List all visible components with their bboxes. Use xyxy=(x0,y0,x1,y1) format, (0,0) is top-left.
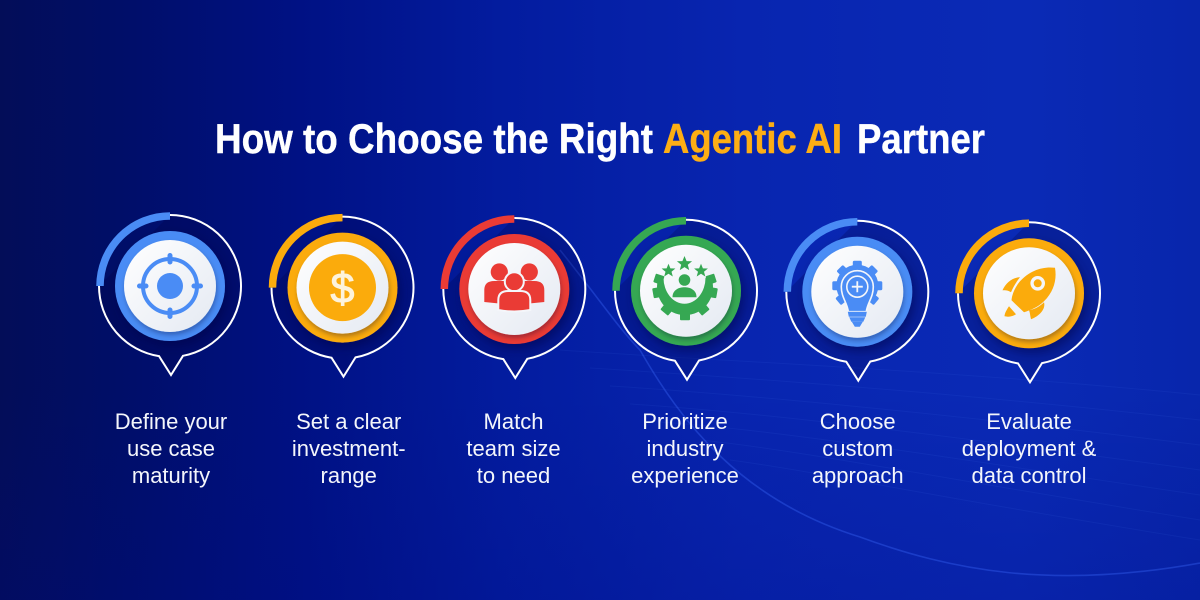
panel: custom approach xyxy=(786,221,928,381)
panel: define use case xyxy=(99,215,241,375)
icon: target xyxy=(140,256,200,316)
label: define your use case maturity: maturity xyxy=(132,463,210,488)
icon: rocket xyxy=(1002,267,1056,319)
label: match team size to need: Match xyxy=(484,409,543,434)
icon: light bulb with gear xyxy=(832,261,882,327)
label: prioritize industry experience: industry xyxy=(646,436,724,461)
panel: team size xyxy=(443,218,585,378)
label: prioritize industry experience: Prioritize xyxy=(642,409,728,434)
label: set a clear investment range: range xyxy=(321,463,377,488)
label: choose custom approach: custom xyxy=(822,436,893,461)
title: How to Choose the Right xyxy=(215,115,653,162)
panel: industry experience xyxy=(615,220,757,380)
label: define your use case maturity: Define your xyxy=(115,409,227,434)
icon: gear with person and stars xyxy=(652,256,718,320)
label: evaluate deployment and data control: Evaluate xyxy=(986,409,1072,434)
label: define your use case maturity: use case xyxy=(127,436,215,461)
label: prioritize industry experience: experience xyxy=(631,463,739,488)
title: Partner xyxy=(857,115,985,162)
label: choose custom approach: Choose xyxy=(820,409,896,434)
label: match team size to need: team size xyxy=(466,436,561,461)
title xyxy=(215,115,985,162)
icon: dollar coin xyxy=(309,254,376,321)
label: evaluate deployment and data control: data control xyxy=(972,463,1086,488)
label: set a clear investment range: Set a clear xyxy=(296,409,401,434)
title: Agentic AI xyxy=(663,115,842,162)
label: evaluate deployment and data control: deployment & xyxy=(962,436,1097,461)
label: set a clear investment range: investment- xyxy=(292,436,406,461)
label: match team size to need: to need xyxy=(477,463,550,488)
icon: dollar coin: $ xyxy=(331,265,355,313)
label: choose custom approach: approach xyxy=(812,463,904,488)
icon: people xyxy=(484,263,544,312)
panel: investment range xyxy=(272,217,414,377)
panel: deployment and data control xyxy=(958,222,1100,382)
